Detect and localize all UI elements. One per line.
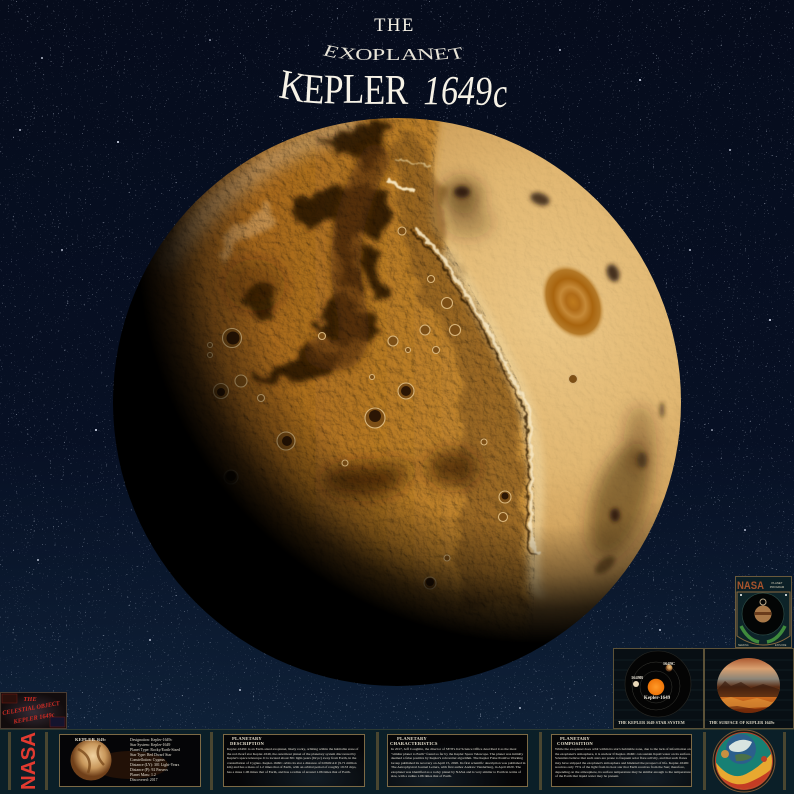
badge: planet program — [735, 576, 792, 648]
panel: star system: 1649C — [663, 661, 675, 666]
title: THE — [374, 16, 415, 36]
panel: Kepler 1649c data — [59, 734, 201, 787]
title: 1649c — [423, 68, 510, 118]
bottom info strip — [0, 729, 794, 794]
panel: planetary characteristics: In 2017, Jeff Coughlin, the director of SETI's K2 Science Office described it as the most "similar planet to Earth" found so far by the Kepler Space Telescope. The planet was initially deemed a false positive by Kepler's robovetter algorithm. The Kepler False Positive Working Group published its recovery on April 15, 2020. Its first scientific description was published in The Astrophysical Journal Letters, with first author Andrew Vanderburg, in April 2020. The exoplanet was identified as a rocky planet by NASA and is very similar to Earth in terms of size, with a radius 1.06 times that of Earth. — [391, 747, 525, 778]
planet Kepler 1649c — [70, 118, 784, 792]
badge: celestial object: CELESTIAL OBJECT — [2, 700, 61, 717]
badge: celestial object — [0, 692, 67, 729]
title: EXOPLANET — [320, 42, 467, 64]
star Kepler-1649 — [648, 679, 664, 695]
panel: star system: Kepler-1649 — [644, 696, 671, 701]
storm eye — [542, 266, 604, 338]
panel: star system — [613, 648, 704, 729]
rough rift band — [395, 128, 525, 612]
panel: Kepler 1649c data: Constellation: Cygnus — [130, 758, 165, 762]
panel: Kepler 1649c data: Star Type: Red Dwarf Star — [130, 753, 171, 757]
panel: Kepler 1649c data: Planet Type: Rocky/Earth-Sized — [130, 748, 180, 752]
panel: planetary composition: PLANETARY — [560, 736, 590, 741]
badge: celestial object: KEPLER 1649c — [12, 711, 55, 726]
panel: planetary characteristics: CHARACTERISTICS — [390, 741, 438, 746]
panel: star system: THE KEPLER 1649 STAR SYSTEM — [618, 720, 685, 725]
bright east bank — [445, 250, 542, 591]
title — [277, 16, 510, 118]
panel: planetary description: Kepler-1649C is an Earth-sized exoplanet, likely rocky, orbiting within the habitable zone of the red dwarf star Kepler-1649, the outermost planet of the planetary system discovered by Kepler's space telescope. It is located about 301 light-years (92 pc) away from Earth, in the constellation of Cygnus. Kepler-1649C orbits its star a distance of 0.0649 AU (9.71 million km) and has a mass of 1.2 times that of Earth, with an orbital period of roughly 19.53 days, has a mass 1.06 times that of Earth, and has a radius of around 1.06 times that of Earth. — [227, 747, 358, 774]
badge: planet program: SEEKING — [738, 644, 749, 647]
badge: planet program: NASA — [737, 580, 764, 592]
panel: Kepler 1649c data: Discovered: 2017 — [130, 778, 158, 782]
medallion: earth emblem — [712, 730, 776, 792]
panel: planetary composition: COMPOSITION — [557, 741, 593, 746]
panel: Kepler 1649c data: Distance (LY): 301 Light-Years — [130, 763, 179, 767]
panel: planetary description: PLANETARY — [232, 736, 262, 741]
planet thumbnail — [70, 740, 168, 780]
western golden plain — [178, 118, 531, 592]
dark lowland band — [250, 122, 390, 384]
panel: planetary description — [223, 734, 365, 787]
rift ridge — [388, 158, 541, 556]
panel: star system: 1649B — [631, 675, 643, 680]
panel: Kepler 1649c data: Distance (P): 92 Parsecs — [130, 768, 168, 772]
panel: planetary characteristics: PLANETARY — [397, 736, 427, 741]
panel: Kepler 1649c data: Planet Mass: 1.2 — [130, 773, 156, 777]
panel: planetary description: DESCRIPTION — [230, 741, 264, 746]
panel: Kepler 1649c data: KEPLER 1649c — [75, 737, 106, 742]
craters — [208, 227, 578, 589]
badge: planet program: PLANET — [772, 581, 783, 585]
dark patches — [238, 281, 278, 317]
panel: planetary composition — [551, 734, 692, 787]
panel: Kepler 1649c data: Star System: Kepler-1649 — [130, 743, 170, 747]
pale upper-left limb — [160, 122, 360, 270]
logo: NASA worm: NASA — [18, 732, 40, 790]
panel: planetary composition: While the exoplanet does orbit within its star's habitable zone, due to the lack of information on the exoplanet's atmosphere, it is unclear if Kepler-1649C can sustain liquid water on its surface. Scientists believe that such stars are prone to frequent solar flare activity, and that such flares may have stripped the exoplanet's atmosphere and hindered the prospect of life. Kepler-1649C receives only 75% of the light from its host star that Earth receives from the Sun; therefore, depending on the atmosphere, its surface temperature may be similar enough to the temperature of the Earth that liquid water may be present. — [555, 747, 691, 778]
badge: planet program: PROGRAM — [770, 585, 785, 589]
title: KEPLER — [277, 61, 408, 114]
badge: planet program: EXPLORE — [775, 644, 787, 647]
badge: celestial object: THE — [23, 696, 37, 703]
panel: surface — [704, 648, 794, 729]
surface relief — [436, 126, 679, 572]
panel: Kepler 1649c data: Designation: Kepler-1649c — [130, 738, 172, 742]
panel: surface: THE SURFACE OF KEPLER 1649c — [709, 720, 775, 725]
panel: planetary characteristics — [387, 734, 528, 787]
